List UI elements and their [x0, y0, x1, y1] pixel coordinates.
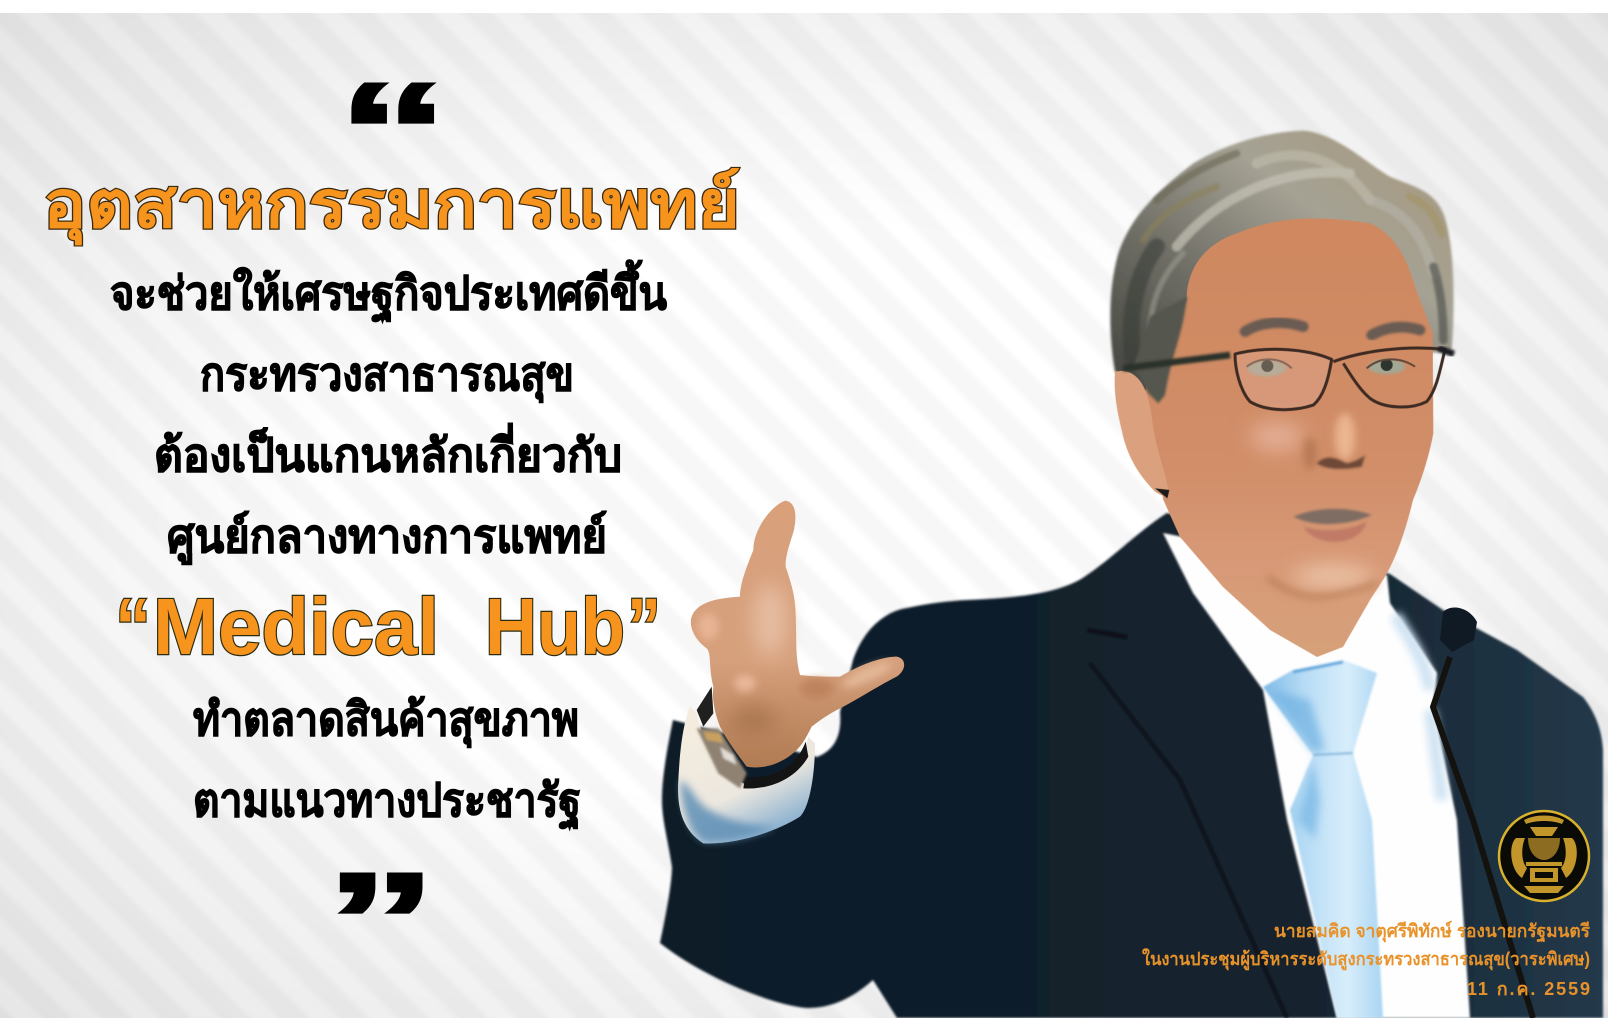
ear lobe shadow: [1155, 488, 1169, 498]
suit jacket: [660, 513, 1603, 1018]
tie: [1263, 660, 1383, 1018]
caption: speaker and event: 11 ก.ค. 2559: [1467, 979, 1590, 999]
caption: speaker and event: นายสมคิด จาตุศรีพิทักษ์ รองนายกรัฐมนตรี: [1274, 920, 1590, 943]
closing quotation mark: ”: [325, 845, 437, 997]
head group: [1110, 131, 1454, 657]
blue cuff shadow: [680, 780, 777, 842]
wrist strap: [743, 742, 808, 788]
facial highlights: [1250, 413, 1377, 597]
eyebrows: [1245, 323, 1420, 335]
nose shadow: [1317, 455, 1365, 469]
quote body lines: [110, 259, 667, 565]
hair: [1110, 131, 1454, 400]
hair at temple: [1133, 297, 1187, 403]
hair highlights and strands: [1131, 153, 1443, 360]
quote body lines: ศูนย์กลางทางการแพทย์: [167, 510, 607, 565]
highlight: Medical Hub: Hub: [485, 582, 625, 671]
opening quotation mark: “: [337, 55, 449, 207]
mouth: [1293, 509, 1372, 542]
glasses: [1123, 348, 1454, 410]
shirt: [1163, 533, 1470, 1018]
photo: speaker: [660, 131, 1603, 1018]
ear: [1115, 371, 1168, 497]
quote body lines: จะช่วยให้เศรษฐกิจประเทศดีขึ้น: [110, 259, 667, 323]
watch: [697, 687, 747, 788]
government emblem: [1499, 811, 1589, 901]
quote body lines: กระทรวงสาธารณสุข: [200, 348, 574, 403]
shirt cuff: [678, 707, 815, 843]
caption: speaker and event: [1142, 920, 1590, 999]
quote closing lines: [193, 693, 581, 830]
face and neck: [1143, 218, 1433, 657]
highlight: Medical Hub: Medical: [153, 582, 439, 671]
quote body lines: ต้องเป็นแกนหลักเกี่ยวกับ: [154, 423, 622, 481]
microphone: [1433, 607, 1533, 1018]
highlight: Medical Hub: ”: [627, 582, 661, 671]
title: orange headline: อุตสาหกรรมการแพทย์: [43, 167, 740, 246]
quote closing lines: ตามแนวทางประชารัฐ: [193, 774, 581, 830]
eyes: [1247, 359, 1415, 376]
hand highlights: [698, 583, 894, 733]
hand group: [678, 501, 904, 843]
collar shading: [1395, 615, 1442, 800]
quote closing lines: ทำตลาดสินค้าสุขภาพ: [193, 693, 579, 748]
hand: [691, 501, 904, 768]
lapel creases: [1087, 630, 1287, 1018]
highlight: Medical Hub: “: [115, 582, 151, 671]
highlight: Medical Hub: [115, 582, 661, 671]
